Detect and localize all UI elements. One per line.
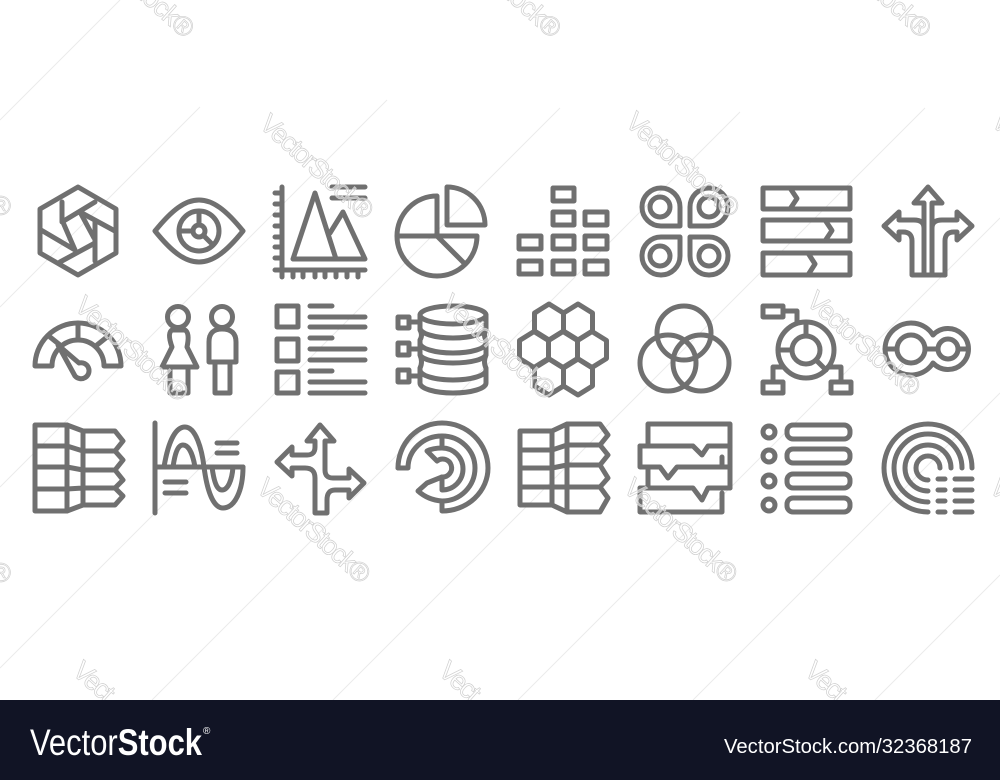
icon: junction arrows: [277, 425, 364, 513]
icon: three way arrows: [884, 187, 972, 275]
icon: mountain chart: [275, 187, 365, 277]
icon: sine wave graph: [155, 423, 243, 513]
icon: database with nodes: [398, 306, 486, 393]
icon: table with arrow tabs: [35, 425, 123, 511]
icon: stacked blocks: [519, 188, 607, 274]
watermarks: VectorStock®: [620, 106, 746, 224]
icon: woman and man: [162, 306, 236, 393]
icon: gauge: [35, 323, 121, 379]
watermarks: VectorStock®: [618, 472, 744, 590]
watermarks: VectorStock®: [69, 290, 195, 408]
icon: table with arrow tabs, variant: [520, 424, 608, 512]
footer image id: VectorStock.com/32368187: [724, 736, 972, 758]
icon: broken layers: [640, 424, 730, 512]
watermarks: Vect: [799, 655, 854, 709]
watermarks: VectorStock®: [436, 288, 562, 406]
watermarks: VectorStock®: [251, 472, 377, 590]
icon: pie chart: [397, 187, 485, 276]
icon: hexagon aperture: [40, 187, 116, 275]
icon: eye with target: [155, 200, 243, 262]
footer logo: VectorStock: [30, 722, 202, 763]
icon: four petals: [642, 188, 728, 275]
icon: honeycomb: [520, 304, 606, 395]
icon: circle with linked boxes: [763, 306, 851, 393]
watermarks: Vect: [433, 655, 488, 709]
registered mark: ®: [203, 726, 211, 737]
icon: venn diagram: [640, 306, 729, 391]
icon: concentric arcs with legend: [884, 424, 972, 512]
watermarks: VectorStock®: [254, 108, 380, 226]
watermarks: VectorStock®: [801, 285, 927, 403]
footer bar: [0, 700, 1000, 780]
icon: radial segments: [398, 423, 488, 511]
icon: infinity rings: [885, 323, 968, 375]
icon: progress bars: [763, 188, 850, 275]
watermarks: Vect: [67, 655, 122, 709]
icon set: [35, 187, 972, 513]
icon: checklist: [277, 306, 365, 393]
icon: bullet list: [763, 425, 850, 512]
